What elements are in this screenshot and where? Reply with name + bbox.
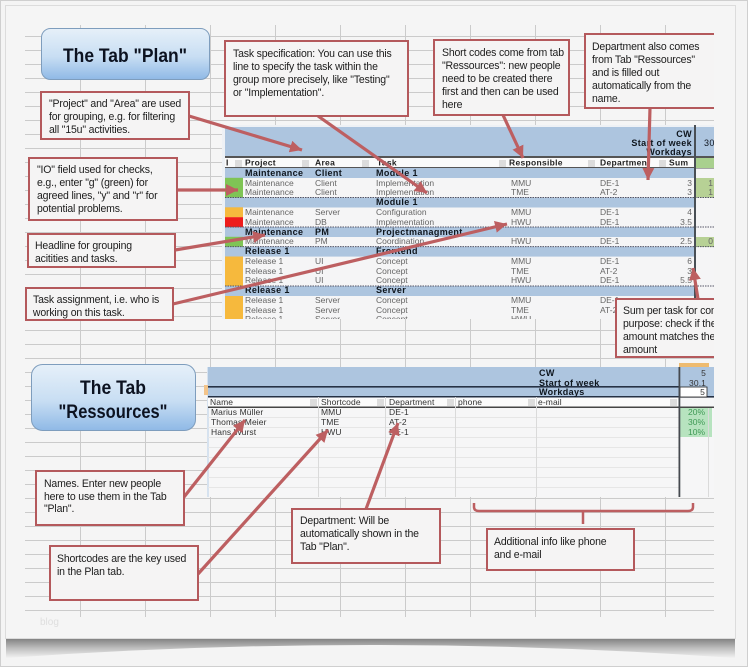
- callout: department in resources: automatically shown in the: [300, 528, 419, 540]
- arrow: task assignment: [173, 224, 507, 304]
- callout: shortcodes: in the Plan tab.: [57, 566, 125, 578]
- table: Ressources tab spreadsheet: Shortcode: [321, 397, 361, 407]
- table: Plan tab spreadsheet: PM: [315, 227, 329, 237]
- callout: task assignment: Task assignment, i.e. who is: [33, 294, 160, 306]
- table: Plan tab spreadsheet: 30: [704, 138, 715, 148]
- table: Plan tab spreadsheet: Release 1: [245, 246, 290, 256]
- table: Plan tab spreadsheet: 4: [687, 207, 692, 217]
- table: Plan tab spreadsheet: Start of week: [631, 138, 693, 148]
- table: Plan tab spreadsheet: UI: [315, 275, 324, 285]
- table: Plan tab spreadsheet: 1: [708, 178, 713, 188]
- table: Plan tab spreadsheet: Release 1: [245, 305, 284, 315]
- table: Plan tab spreadsheet: Module 1: [376, 197, 418, 207]
- table: Ressources tab spreadsheet: AT-2: [389, 417, 407, 427]
- callout: names: [36, 471, 184, 525]
- callout: IO field: [29, 158, 177, 220]
- title: The Tab Ressources: "Ressources": [58, 402, 168, 423]
- callout: shortcodes: Shortcodes are the key used: [57, 553, 186, 565]
- callout: department: [585, 34, 725, 108]
- table: Ressources tab spreadsheet: MMU: [321, 407, 342, 417]
- callout: short codes: need to be created there: [442, 73, 553, 85]
- callout: sum per task: amount: [623, 344, 657, 356]
- table: Plan tab spreadsheet: Maintenance: [245, 227, 303, 237]
- table: Plan tab spreadsheet: Coordination: [376, 236, 424, 246]
- table: Plan tab spreadsheet: HWU: [511, 236, 531, 246]
- table: Plan tab spreadsheet: Concept: [376, 266, 408, 276]
- table: Plan tab spreadsheet: DE-1: [600, 236, 620, 246]
- table: Plan tab spreadsheet: Module 1: [376, 168, 418, 178]
- arrow: sum per task: [693, 268, 698, 299]
- callout: headline: Headline for grouping: [35, 240, 132, 252]
- table: Plan tab spreadsheet: UI: [315, 256, 324, 266]
- table: Plan tab spreadsheet: Client: [315, 168, 342, 178]
- callout: project and area: for grouping, e.g. for filtering: [49, 111, 175, 123]
- table: Plan tab spreadsheet: Sum: [669, 158, 688, 168]
- table: Plan tab spreadsheet: Release 1: [245, 295, 284, 305]
- table: Plan tab spreadsheet: AT-2: [600, 187, 618, 197]
- table: Plan tab spreadsheet: DE-1: [600, 207, 620, 217]
- arrow: task specification: [318, 116, 427, 193]
- arrow: project and area: [189, 116, 302, 150]
- table: Plan tab spreadsheet: Concept: [376, 314, 408, 324]
- table: Plan tab spreadsheet: CW: [676, 129, 692, 139]
- table: Ressources tab spreadsheet: HWU: [321, 427, 342, 437]
- callout: short codes: first and then can be used: [442, 86, 559, 98]
- arrow: department: [648, 108, 650, 180]
- watermark: blog: blog: [40, 617, 59, 628]
- callout: names: "Plan".: [44, 503, 74, 515]
- table: Plan tab spreadsheet: Workdays: [646, 147, 692, 157]
- table: Plan tab spreadsheet: Concept: [376, 305, 408, 315]
- table: Plan tab spreadsheet: DE-1: [600, 295, 620, 305]
- callout: task specification: [225, 41, 408, 116]
- table: Plan tab spreadsheet: Server: [315, 314, 340, 324]
- table: Plan tab spreadsheet: Release 1: [245, 285, 290, 295]
- callout: sum per task: amount matches the: [623, 331, 715, 343]
- table: Plan tab spreadsheet: Projectmanagment: [376, 227, 463, 237]
- table: Ressources tab spreadsheet: 5: [700, 387, 705, 397]
- brace: additional info: [474, 503, 693, 524]
- callout: task specification: or "Implementation".: [233, 87, 324, 99]
- table: Plan tab spreadsheet: Release 1: [245, 275, 284, 285]
- table: Plan tab spreadsheet: Project: [245, 158, 276, 168]
- title: The Tab Ressources: [32, 364, 196, 430]
- callout: project and area: "Project" and "Area" are used: [49, 98, 181, 110]
- table: Plan tab spreadsheet: AT-2: [600, 266, 618, 276]
- table: Plan tab spreadsheet: UI: [315, 266, 324, 276]
- table: Plan tab spreadsheet: Maintenance: [245, 178, 294, 188]
- table: Plan tab spreadsheet: Server: [315, 305, 340, 315]
- callout: additional info: and e-mail: [494, 549, 541, 561]
- table: Plan tab spreadsheet: Department: [600, 158, 650, 168]
- callout: task assignment: working on this task.: [32, 307, 125, 319]
- table: Ressources tab spreadsheet: phone: [458, 397, 482, 407]
- callout: department: from Tab "Ressources": [592, 54, 695, 66]
- table: Plan tab spreadsheet: TME: [511, 187, 529, 197]
- table: Plan tab spreadsheet: 0: [708, 236, 713, 246]
- callout: IO field: agreed lines, "y" and "r" for: [37, 190, 158, 202]
- table: Ressources tab spreadsheet: Workdays: [539, 387, 585, 397]
- callout: department: Department also comes: [592, 41, 700, 53]
- callout: task assignment: [26, 288, 173, 320]
- table: Ressources tab spreadsheet: 30%: [688, 417, 705, 427]
- table: Plan tab spreadsheet: HWU: [511, 314, 531, 324]
- callout: additional info: [487, 529, 634, 570]
- table: Ressources tab spreadsheet: Marius Müller: [211, 407, 263, 417]
- callout: sum per task: purpose: check if the: [623, 318, 717, 330]
- table: Plan tab spreadsheet: Task: [377, 158, 397, 168]
- table: Ressources tab spreadsheet: 10%: [688, 427, 705, 437]
- table: Ressources tab spreadsheet: e-mail: [538, 397, 562, 407]
- callout: task specification: line to specify the task within the: [233, 61, 378, 73]
- table: Plan tab spreadsheet: Implementation: [376, 217, 434, 227]
- table: Plan tab spreadsheet: HWU: [511, 275, 531, 285]
- table: Plan tab spreadsheet: TME: [511, 305, 529, 315]
- table: Plan tab spreadsheet: Implementation: [376, 178, 434, 188]
- table: Plan tab spreadsheet: Concept: [376, 256, 408, 266]
- table: Ressources tab spreadsheet: CW: [539, 368, 555, 378]
- title: The Tab Plan: [42, 28, 210, 80]
- callout: department: name.: [592, 93, 620, 105]
- arrow: IO field: [177, 188, 238, 192]
- table: Plan tab spreadsheet: Concept: [376, 275, 408, 285]
- table: Ressources tab spreadsheet: 20%: [688, 407, 705, 417]
- table: Ressources tab spreadsheet: 5: [701, 368, 706, 378]
- table: Plan tab spreadsheet: HWU: [511, 217, 531, 227]
- callout: task specification: group more precisely, like "Testing": [233, 74, 390, 86]
- table: Plan tab spreadsheet: 3: [687, 187, 692, 197]
- table: Plan tab spreadsheet: DE-1: [600, 178, 620, 188]
- arrow: headline: [175, 235, 265, 250]
- table: Plan tab spreadsheet: DE-1: [600, 275, 620, 285]
- table: Plan tab spreadsheet: Server: [376, 285, 406, 295]
- table: Ressources tab spreadsheet: [204, 363, 714, 497]
- arrow: names: [184, 420, 245, 497]
- table: Ressources tab spreadsheet: TME: [321, 417, 339, 427]
- callout: department in resources: Tab "Plan".: [300, 541, 350, 553]
- table: Plan tab spreadsheet: Release 1: [245, 256, 284, 266]
- title: The Tab Plan: The Tab "Plan": [63, 45, 187, 67]
- table: Plan tab spreadsheet: PM: [315, 236, 328, 246]
- table: Plan tab spreadsheet: Area: [315, 158, 335, 168]
- table: Plan tab spreadsheet: 3: [687, 266, 692, 276]
- table: Ressources tab spreadsheet: 30.1: [689, 378, 706, 388]
- table: Plan tab spreadsheet: Release 1: [245, 266, 284, 276]
- table: Plan tab spreadsheet: 3.5: [680, 217, 692, 227]
- table: Plan tab spreadsheet: DE-1: [600, 256, 620, 266]
- arrow: department in resources: [366, 423, 398, 509]
- table: Plan tab spreadsheet: Maintenance: [245, 217, 294, 227]
- table: Plan tab spreadsheet: Client: [315, 178, 337, 188]
- callout: names: here to use them in the Tab: [44, 491, 167, 503]
- table: Plan tab spreadsheet: Responsible: [509, 158, 563, 168]
- table: Ressources tab spreadsheet: Hans Wurst: [211, 427, 257, 437]
- callout: sum per task: [615, 298, 714, 358]
- table: Ressources tab spreadsheet: DE-1: [389, 427, 409, 437]
- callout: department in resources: [292, 509, 440, 563]
- table: Plan tab spreadsheet: Maintenance: [245, 207, 294, 217]
- table: Plan tab spreadsheet: 2.5: [680, 236, 692, 246]
- table: Ressources tab spreadsheet: Name: [210, 397, 233, 407]
- table: Plan tab spreadsheet: 1: [708, 187, 713, 197]
- table: Plan tab spreadsheet: MMU: [511, 178, 531, 188]
- table: Plan tab spreadsheet: Server: [315, 207, 340, 217]
- callout: sum per task: Sum per task for control: [623, 305, 730, 317]
- arrow: shortcodes: [198, 430, 328, 574]
- callout: short codes: here: [442, 99, 462, 111]
- callout: task specification: Task specification: You can use this: [233, 48, 392, 60]
- table: Plan tab spreadsheet: AT-2: [600, 305, 618, 315]
- table: Plan tab spreadsheet: Maintenance: [245, 187, 294, 197]
- table: Plan tab spreadsheet: MMU: [511, 295, 531, 305]
- callout: shortcodes: [50, 546, 198, 600]
- table: Ressources tab spreadsheet: DE-1: [389, 407, 409, 417]
- callout: names: Names. Enter new people: [44, 478, 161, 490]
- table: Plan tab spreadsheet: DE-1: [600, 217, 620, 227]
- callout: headline: acitities and tasks.: [35, 253, 118, 265]
- title: The Tab Ressources: The Tab: [80, 378, 146, 399]
- callout: short codes: "Ressources": new people: [442, 60, 561, 72]
- table: Plan tab spreadsheet: Maintenance: [245, 168, 303, 178]
- table: Plan tab spreadsheet: Concept: [376, 295, 408, 305]
- table: Plan tab spreadsheet: MMU: [511, 207, 531, 217]
- callout: project and area: all "15u" activities.: [49, 124, 130, 136]
- table: Plan tab spreadsheet: Client: [315, 187, 337, 197]
- table: Ressources tab spreadsheet: Department: [389, 397, 435, 407]
- table: Ressources tab spreadsheet: Thomas Meier: [211, 417, 267, 427]
- table: Plan tab spreadsheet: Server: [315, 295, 340, 305]
- callout: headline: [28, 234, 175, 267]
- table: Plan tab spreadsheet: 3: [687, 178, 692, 188]
- table: Plan tab spreadsheet: DB: [315, 217, 327, 227]
- callout: IO field: "IO" field used for checks,: [37, 164, 153, 176]
- table: Plan tab spreadsheet: 6: [687, 256, 692, 266]
- callout: additional info: Additional info like phone: [494, 536, 607, 548]
- callout: IO field: e.g., enter "g" (green) for: [37, 177, 148, 189]
- table: Plan tab spreadsheet: MMU: [511, 256, 531, 266]
- callout: short codes: Short codes come from tab: [442, 47, 564, 59]
- arrow: short codes: [503, 115, 523, 158]
- table: Plan tab spreadsheet: TME: [511, 266, 529, 276]
- callout: short codes: [434, 40, 569, 115]
- table: Plan tab spreadsheet: I: [226, 158, 229, 168]
- callout: department: and is filled out: [592, 67, 659, 79]
- table: Plan tab spreadsheet: Release 1: [245, 314, 284, 324]
- table: Plan tab spreadsheet: 5.5: [680, 275, 692, 285]
- callout: IO field: potential problems.: [37, 203, 123, 215]
- callout: project and area: [41, 92, 189, 139]
- table: Plan tab spreadsheet: Maintenance: [245, 236, 294, 246]
- table: Ressources tab spreadsheet: Start of week: [539, 378, 600, 388]
- callout: department: automatically from the: [592, 80, 691, 92]
- table: Plan tab spreadsheet: Frontend: [376, 246, 418, 256]
- callout: department in resources: Department: Will be: [300, 515, 389, 527]
- table: Plan tab spreadsheet: Configuration: [376, 207, 427, 217]
- table: Plan tab spreadsheet: Implementation: [376, 187, 434, 197]
- table: Plan tab spreadsheet: [222, 125, 715, 324]
